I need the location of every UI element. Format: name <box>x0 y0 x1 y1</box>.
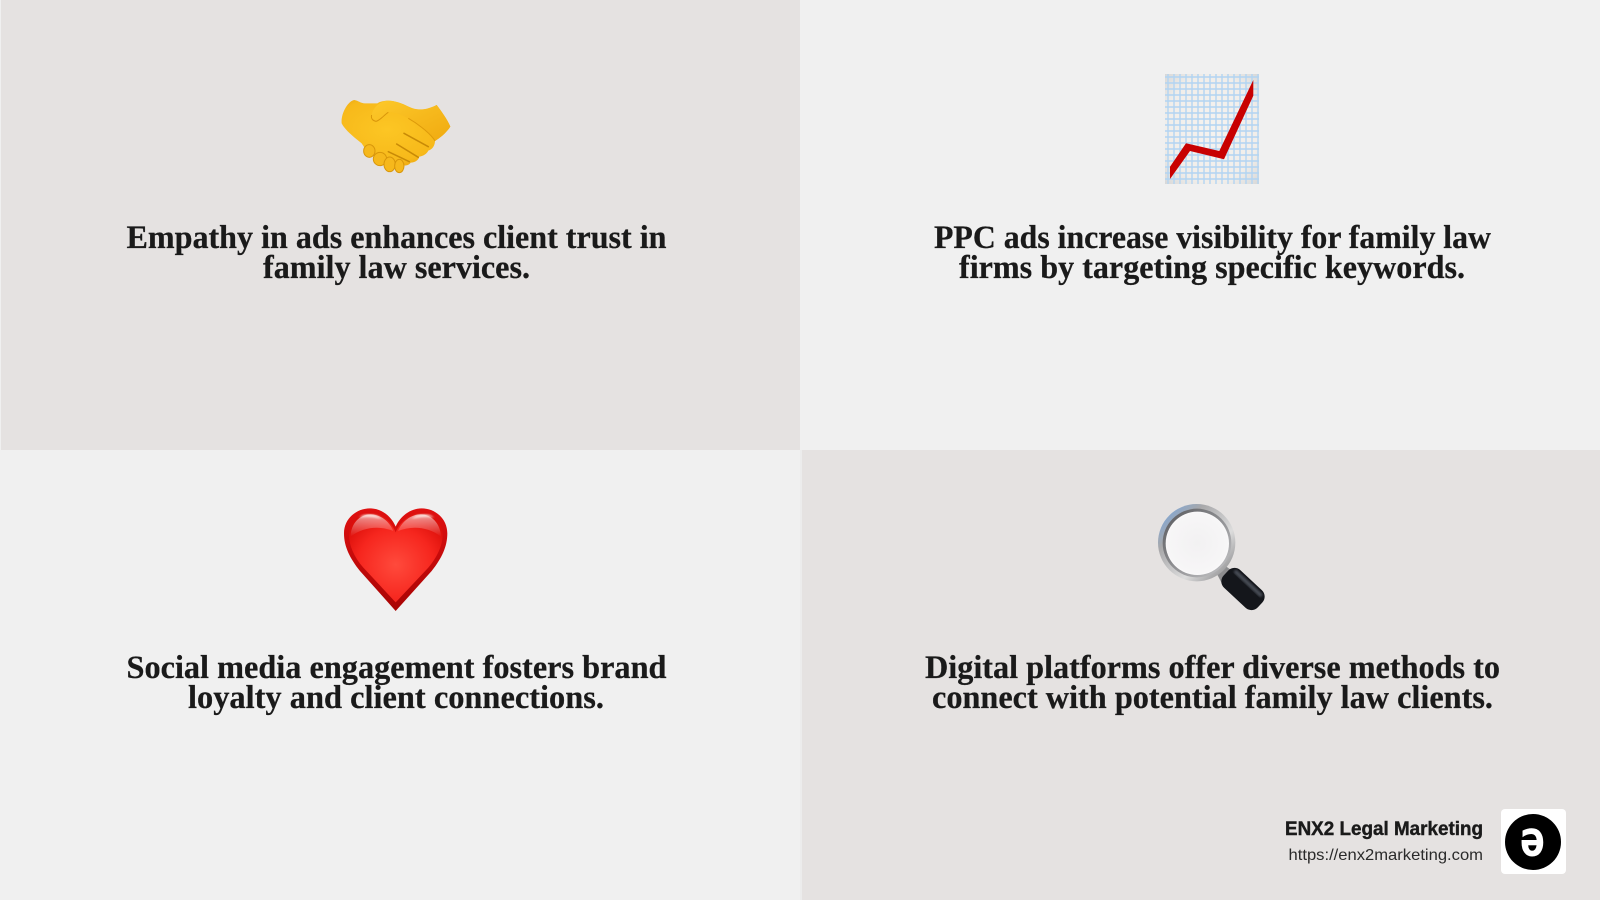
heading: empathy <box>126 220 666 286</box>
heading: empathy: Empathy in ads enhances client trust in <box>126 220 666 256</box>
brand url: https://enx2marketing.com <box>1288 847 1483 864</box>
brand name: ENX2 Legal Marketing <box>1285 819 1483 840</box>
panel: social <box>0 450 800 900</box>
footer brand <box>1285 809 1566 874</box>
icon: handshake <box>342 100 450 173</box>
panel: ppc <box>800 0 1600 450</box>
heading: digital <box>925 650 1500 716</box>
heading: digital: connect with potential family law clients. <box>932 680 1493 716</box>
heading: ppc: PPC ads increase visibility for family law <box>934 220 1491 256</box>
logo: ə <box>1520 811 1545 868</box>
panel: empathy <box>0 0 800 450</box>
heading: ppc: firms by targeting specific keywords. <box>959 250 1465 286</box>
heading: social: Social media engagement fosters brand <box>126 650 666 686</box>
logo <box>1501 809 1566 874</box>
heading: social: loyalty and client connections. <box>188 680 604 716</box>
heading: empathy: family law services. <box>263 250 530 286</box>
icon: magnifying glass <box>1158 504 1268 614</box>
icon: chart increasing <box>1165 74 1259 184</box>
panel: digital <box>800 450 1600 900</box>
heading: ppc <box>934 220 1491 286</box>
heading: social <box>126 650 666 716</box>
icon: heart <box>344 508 447 611</box>
heading: digital: Digital platforms offer diverse methods to <box>925 650 1500 686</box>
